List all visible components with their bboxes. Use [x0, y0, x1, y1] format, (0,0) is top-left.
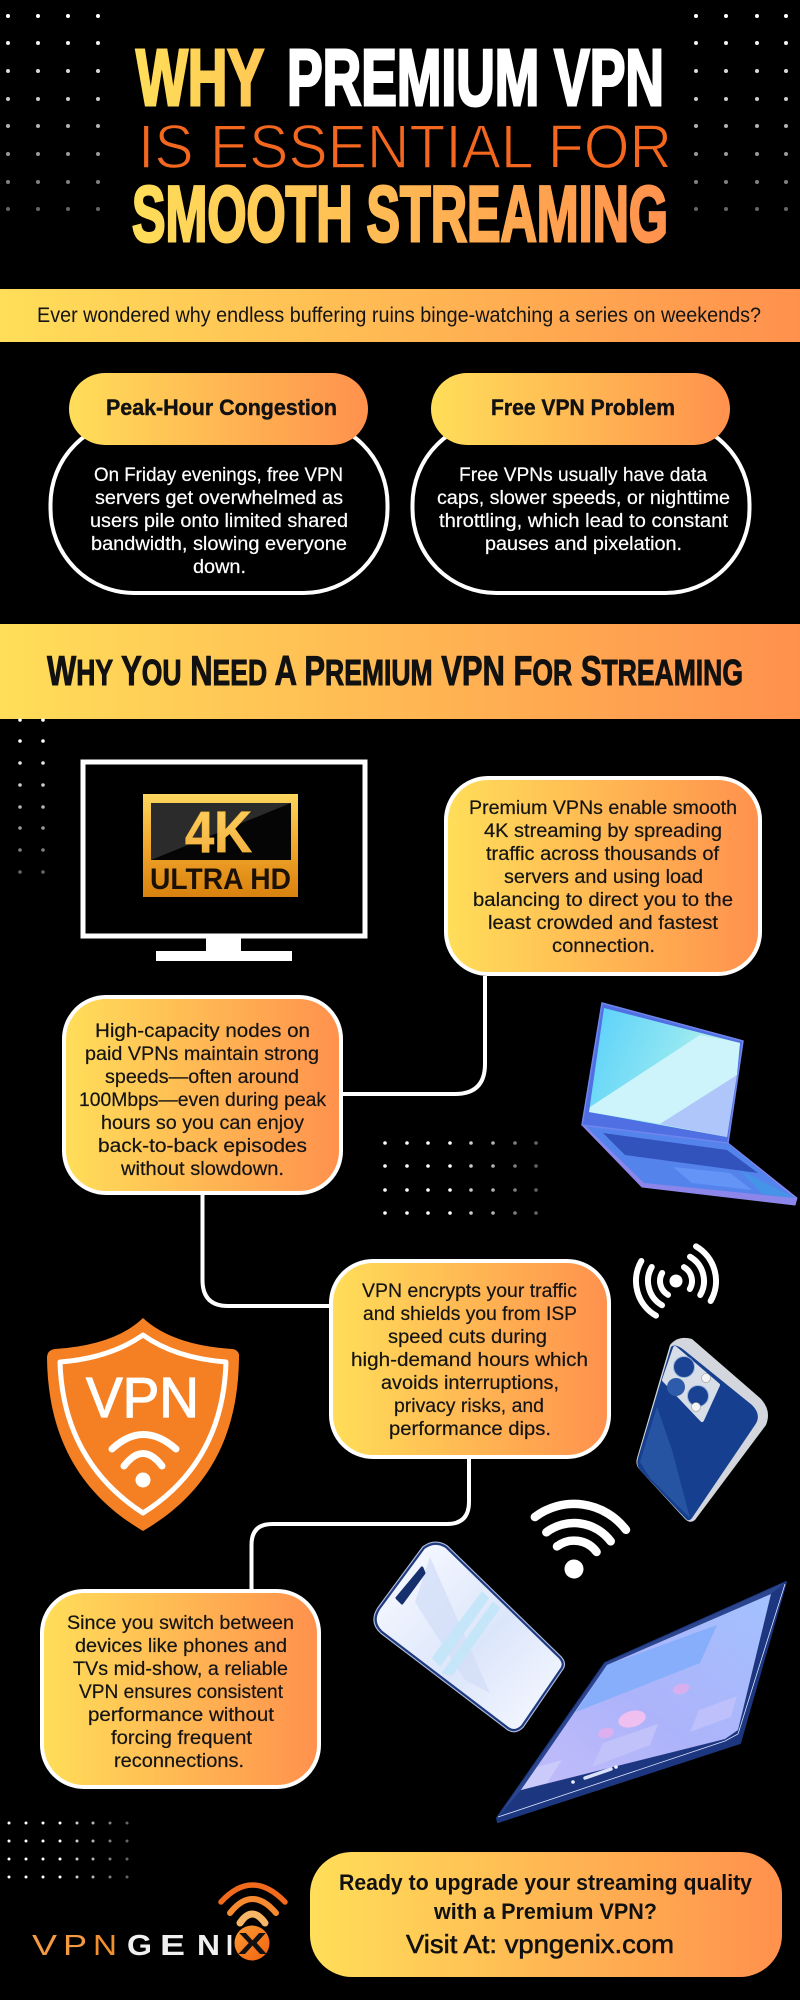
panel: peak-hour congestion	[50, 373, 388, 593]
panel: encryption: speed cuts during	[388, 1327, 547, 1348]
body text: On Friday evenings, free VPN	[94, 465, 343, 486]
title	[132, 33, 672, 258]
icon: wifi	[527, 1498, 629, 1585]
call to action	[310, 1852, 782, 1977]
panel: high-capacity nodes: speeds—often around	[105, 1067, 299, 1088]
body text: bandwidth, slowing everyone	[91, 534, 347, 555]
panel: high-capacity nodes: 100Mbps—even during peak	[79, 1090, 327, 1111]
panel: high-capacity nodes: back-to-back episodes	[98, 1136, 307, 1157]
body text: users pile onto limited shared	[90, 511, 348, 532]
pill heading	[431, 373, 730, 445]
panel: encryption: high-demand hours which	[351, 1350, 588, 1371]
panel: encryption: privacy risks, and	[394, 1396, 544, 1417]
panel: 4K streaming: least crowded and fastest	[488, 913, 719, 934]
body text: pauses and pixelation.	[485, 534, 682, 555]
panel: high-capacity nodes	[64, 997, 341, 1193]
laptop lid	[582, 1003, 743, 1143]
logo: VPNGENIX: N	[197, 1930, 220, 1962]
4K Ultra HD badge	[143, 794, 298, 897]
pill heading: Free VPN Problem	[491, 395, 675, 420]
logo: VPNGENIX: V	[32, 1930, 58, 1962]
icon: VPN shield: VPN	[86, 1366, 199, 1430]
panel: device switching: forcing frequent	[111, 1728, 253, 1749]
outline body	[412, 420, 750, 593]
panel: high-capacity nodes: hours so you can enjoy	[101, 1113, 305, 1134]
4K Ultra HD badge: ULTRA HD	[150, 863, 291, 896]
logo: VPNGENIX: X	[238, 1926, 267, 1961]
panel: device switching: Since you switch between	[67, 1613, 294, 1634]
dot pattern centre	[383, 1141, 538, 1215]
outline body	[50, 420, 388, 593]
panel: device switching: performance without	[88, 1705, 275, 1726]
panel: 4K streaming	[446, 778, 760, 974]
icon: radio waves	[630, 1243, 722, 1319]
connector 1	[343, 976, 485, 1094]
pill heading	[69, 373, 368, 445]
icon: TV with 4K Ultra HD badge	[83, 762, 365, 961]
panel: 4K streaming: balancing to direct you to the	[473, 890, 733, 911]
section heading banner	[0, 624, 800, 719]
call to action: with a Premium VPN?	[433, 1899, 657, 1924]
panel: 4K streaming: servers and using load	[504, 867, 703, 888]
panel: high-capacity nodes: without slowdown.	[120, 1159, 284, 1180]
panel: encryption: performance dips.	[389, 1419, 551, 1440]
dot pattern bottom left	[8, 1822, 128, 1878]
body text: throttling, which lead to constant	[439, 511, 729, 532]
icon: VPN shield	[47, 1318, 239, 1531]
laptop base	[582, 1125, 797, 1205]
dot pattern left of TV	[18, 718, 45, 874]
logo: VPNGENIX: E	[160, 1930, 185, 1962]
icon: phone back	[636, 1338, 768, 1522]
icon: laptop	[582, 1003, 797, 1205]
panel: encryption: VPN encrypts your traffic	[362, 1281, 577, 1302]
logo: VPNGENIX: N	[93, 1930, 117, 1962]
panel: 4K streaming: Premium VPNs enable smooth	[469, 798, 737, 819]
panel: encryption: and shields you from ISP	[363, 1304, 577, 1325]
panel: device switching: VPN ensures consistent	[79, 1682, 284, 1703]
body text: down.	[193, 557, 246, 578]
4K Ultra HD badge: 4K	[185, 800, 252, 865]
panel: encryption: avoids interruptions,	[381, 1373, 559, 1394]
section heading banner: WHY YOU NEED A PREMIUM VPN FOR STREAMING	[47, 647, 743, 694]
call to action: Visit At: vpngenix.com	[406, 1929, 674, 1959]
icon: phone front	[376, 1544, 563, 1730]
panel: 4K streaming: traffic across thousands of	[486, 844, 720, 865]
panel: 4K streaming: connection.	[552, 936, 655, 957]
panel: free VPN problem	[412, 373, 750, 593]
logo: VPNGENIX: I	[226, 1930, 233, 1962]
body text: Free VPNs usually have data	[459, 465, 707, 486]
intro banner	[0, 289, 800, 342]
title: WHY	[136, 33, 264, 122]
panel: high-capacity nodes: High-capacity nodes on	[95, 1021, 310, 1042]
body text: caps, slower speeds, or nighttime	[437, 488, 730, 509]
pill heading: Peak-Hour Congestion	[106, 395, 337, 420]
connector 3	[252, 1459, 469, 1589]
panel: 4K streaming: 4K streaming by spreading	[484, 821, 722, 842]
dot pattern top left	[6, 14, 100, 211]
logo: VPNGENIX: P	[63, 1930, 87, 1962]
body text: servers get overwhelmed as	[95, 488, 343, 509]
intro banner: Ever wondered why endless buffering ruins binge-watching a series on weekends?	[37, 304, 761, 327]
connector 2	[202, 1195, 329, 1306]
panel: device switching: reconnections.	[114, 1751, 244, 1772]
call to action: Ready to upgrade your streaming quality	[339, 1870, 753, 1895]
logo: VPNGENIX: G	[127, 1930, 152, 1962]
panel: device switching: devices like phones and	[75, 1636, 287, 1657]
logo: VPNGENIX	[32, 1885, 285, 1962]
icon: tablet	[497, 1582, 786, 1822]
body text	[437, 465, 730, 555]
panel: device switching: TVs mid-show, a reliable	[73, 1659, 288, 1680]
panel: device switching	[42, 1591, 319, 1787]
dot pattern top right	[694, 14, 788, 211]
title: IS ESSENTIAL FOR	[138, 113, 672, 182]
panel: encryption	[331, 1261, 609, 1457]
body text	[90, 465, 348, 578]
panel: high-capacity nodes: paid VPNs maintain strong	[85, 1044, 319, 1065]
